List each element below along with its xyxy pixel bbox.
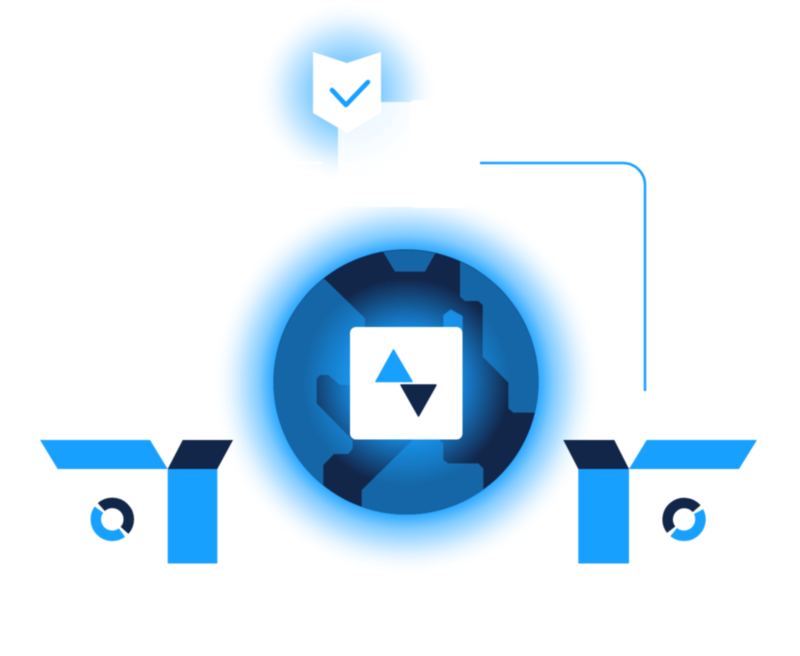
globe glow <box>212 188 600 576</box>
central white tile <box>350 327 462 440</box>
shield glow <box>255 0 439 184</box>
right open box <box>563 440 757 564</box>
icon: up triangle <box>376 350 412 382</box>
globe land masses <box>273 250 539 515</box>
left ring icon <box>96 503 129 536</box>
faint white connector line <box>287 161 322 164</box>
globe <box>272 248 540 516</box>
shield icon <box>313 52 381 133</box>
blue connector line <box>480 163 645 391</box>
faint white card <box>338 100 468 208</box>
infographic illustration <box>40 12 758 565</box>
left open box <box>40 440 233 564</box>
icon: down triangle <box>401 385 436 416</box>
icon: check mark <box>332 82 368 105</box>
right ring icon <box>668 503 700 536</box>
globe inner glow <box>302 278 510 486</box>
